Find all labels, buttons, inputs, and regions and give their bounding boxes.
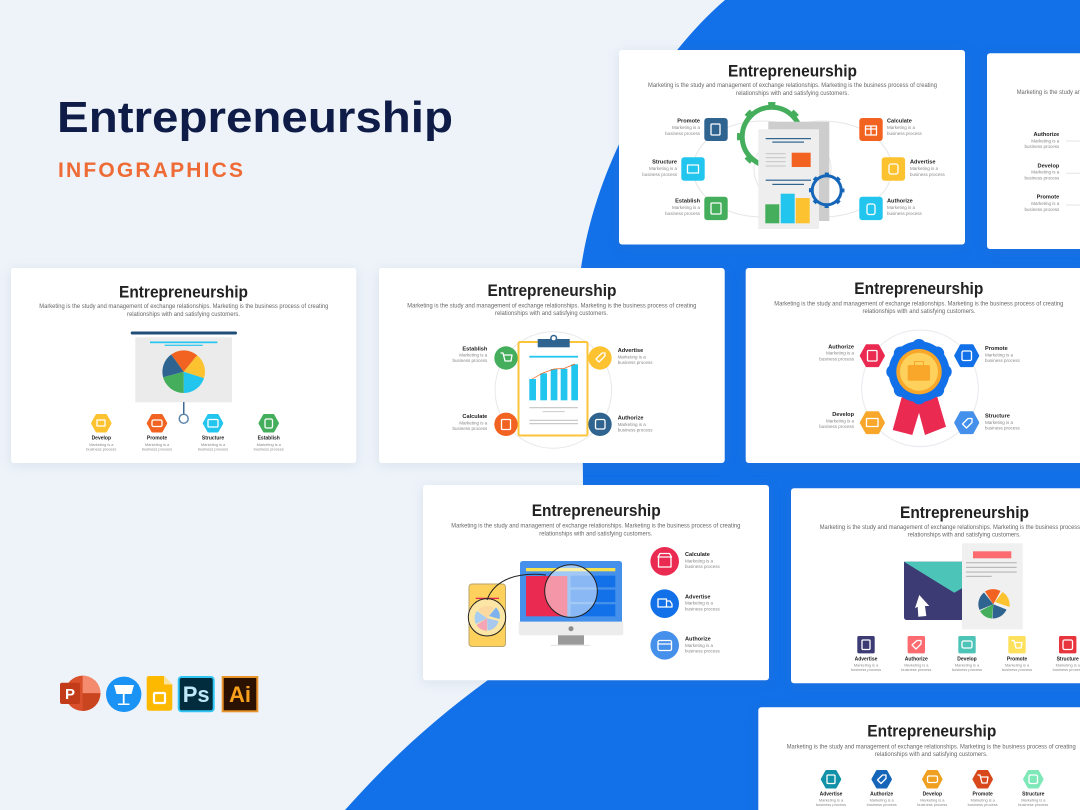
item: Authorize: Marketing is a	[618, 422, 646, 427]
item: Authorize: business process	[618, 427, 653, 432]
item: Authorize: Authorize	[905, 657, 928, 663]
item: Establish: Marketing is a	[459, 352, 488, 358]
item: Structure	[642, 157, 705, 181]
item: Advertise: Advertise	[685, 594, 710, 600]
panel: partial slide top right	[987, 53, 1080, 249]
item: Promote: Marketing is a	[145, 442, 170, 447]
item: Structure	[1018, 771, 1048, 807]
award badge	[886, 339, 952, 435]
item: Develop: Marketing is a	[826, 418, 854, 423]
pie chart	[978, 589, 1010, 619]
item: Calculate: Calculate	[887, 119, 912, 125]
item: Authorize: business process	[901, 667, 931, 672]
item: Promote: Marketing is a	[985, 352, 1014, 357]
item: Calculate	[859, 118, 923, 141]
heading: Entrepreneurship	[488, 282, 616, 300]
item: Structure: business process	[198, 447, 228, 452]
item: Advertise: Marketing is a	[819, 797, 844, 802]
item: Structure: Marketing is a	[201, 442, 226, 447]
item: Calculate: Calculate	[685, 552, 710, 558]
description: relationships with and satisfying customers.	[127, 312, 240, 318]
description: Marketing is the study and management of exchange relationships. Marketing is the business process of creating	[451, 524, 740, 530]
item: Promote: business process	[968, 802, 998, 807]
item: Advertise: business process	[910, 172, 946, 177]
item: Promote: Promote	[985, 346, 1008, 352]
item: Develop: Marketing is a	[89, 442, 114, 447]
panel: slide with monitor and phone	[423, 485, 769, 680]
report page	[962, 543, 1023, 629]
item: Authorize: Marketing is a	[826, 351, 854, 356]
magnifying lens	[487, 565, 597, 617]
item: Authorize: Authorize	[685, 636, 711, 642]
item: Promote: business process	[985, 358, 1021, 363]
item: Authorize: Authorize	[870, 791, 893, 797]
description: relationships with and satisfying customers.	[539, 532, 653, 538]
icon: PowerPoint	[60, 676, 100, 711]
heading: Entrepreneurship	[867, 723, 996, 741]
item: Promote: Promote	[1007, 657, 1027, 663]
item: Promote: Promote	[677, 119, 700, 125]
description	[774, 301, 1063, 315]
item: Establish: Marketing is a	[257, 442, 282, 447]
item: Authorize: business process	[685, 649, 721, 654]
item: Develop: business process	[86, 447, 116, 452]
item: Structure: Marketing is a	[1056, 662, 1080, 668]
item: Authorize: business process	[887, 211, 923, 216]
item: Authorize: Marketing is a	[1031, 138, 1060, 143]
pie chart	[162, 350, 205, 393]
heading: Entrepreneurship	[728, 62, 857, 80]
item: Promote: Promote	[147, 436, 167, 442]
item: Authorize	[650, 631, 721, 660]
description: relationships with and satisfying customers.	[736, 91, 849, 97]
description: relationships with and satisfying customers.	[862, 309, 976, 315]
item: Calculate	[453, 413, 518, 436]
item: Develop: business process	[819, 424, 855, 429]
item: Advertise	[851, 636, 881, 672]
item: Develop	[86, 415, 116, 452]
item: Calculate: business process	[685, 564, 721, 569]
item: Calculate: Marketing is a	[685, 558, 714, 564]
item: Develop: Develop	[923, 791, 942, 797]
icon: Illustrator: Ai	[229, 682, 251, 707]
description: Marketing is the study and management of exchange relationships. Marketing is the business process of creating	[407, 303, 696, 309]
item: Develop: Develop	[957, 657, 977, 663]
item: Authorize: business process	[1025, 144, 1060, 149]
item: Advertise: Advertise	[820, 791, 843, 797]
panel: slide with envelope and report	[791, 488, 1080, 683]
icon: Photoshop: Ps	[183, 682, 210, 707]
item: Establish: business process	[453, 358, 488, 363]
item: Structure: Structure	[985, 413, 1010, 419]
item: Develop	[952, 636, 982, 672]
item: Establish: business process	[254, 447, 284, 452]
item: Develop: Develop	[832, 412, 855, 418]
heading: Entrepreneurship	[854, 280, 983, 298]
item: Promote: business process	[1002, 667, 1032, 672]
description	[648, 83, 937, 97]
item: Develop	[819, 412, 884, 433]
icon: Google Slides	[147, 676, 172, 711]
panel: slide with document and gears	[619, 50, 965, 244]
item: Promote: business process	[142, 447, 172, 452]
item: Develop: business process	[1025, 175, 1060, 180]
item: Structure: Structure	[1057, 657, 1079, 663]
description: Marketing is the study and management of exchange relationships. Marketing is the business process of creating	[787, 744, 1076, 750]
desktop monitor	[519, 561, 623, 646]
blue background shape	[345, 0, 1080, 810]
item: Establish: Marketing is a	[672, 205, 700, 210]
item: Advertise: Marketing is a	[854, 662, 879, 668]
item: Authorize	[859, 197, 923, 220]
item: Calculate: Marketing is a	[459, 420, 488, 426]
panel: slide with clipboard chart	[379, 268, 725, 463]
item: Authorize: business process	[819, 356, 855, 361]
item: Establish: Establish	[462, 346, 488, 352]
item: Develop: Develop	[92, 436, 111, 442]
item: Advertise: Advertise	[910, 160, 936, 166]
item: Authorize: Marketing is a	[685, 643, 714, 648]
item: Advertise	[816, 771, 846, 807]
item: Promote: business process	[1025, 207, 1060, 212]
item: Develop: Develop	[1038, 163, 1060, 169]
item: Advertise	[882, 157, 946, 181]
item: Establish	[453, 346, 518, 370]
item: Advertise: business process	[851, 667, 881, 672]
heading: Entrepreneurship	[119, 283, 248, 301]
item: Authorize	[867, 771, 897, 807]
item: Structure: Marketing is a	[985, 420, 1014, 425]
item: Advertise	[650, 589, 721, 618]
item: Advertise: Marketing is a	[910, 166, 939, 171]
item: Structure	[1053, 636, 1080, 672]
item: Authorize	[819, 344, 884, 366]
item: Develop: Marketing is a	[1031, 170, 1060, 175]
icon: Photoshop	[179, 677, 214, 711]
description	[39, 304, 328, 318]
item: Promote: Marketing is a	[1031, 201, 1060, 206]
item: Structure: Structure	[652, 160, 677, 166]
item: Advertise: business process	[618, 360, 653, 365]
item: Authorize: business process	[867, 802, 897, 807]
item: Promote	[955, 346, 1021, 366]
item: Establish	[254, 415, 284, 452]
panel: bottom slide with hexagons	[758, 707, 1080, 810]
item: Develop: business process	[952, 667, 982, 672]
item: Calculate	[650, 547, 721, 576]
description: Marketing is the study and management of exchange relationships. Marketing is the business process of creating	[648, 83, 937, 89]
item: Structure	[955, 412, 1021, 433]
item: Authorize: Authorize	[618, 415, 643, 421]
item: Develop	[917, 771, 947, 807]
item: Calculate: Calculate	[462, 414, 487, 420]
heading: Entrepreneurship	[532, 502, 661, 520]
item: Advertise	[588, 346, 653, 370]
item: Calculate: business process	[453, 426, 488, 431]
description: Marketing is the study and management of exchange relationships. Marketing is the business process of creating	[39, 304, 328, 310]
icon: Illustrator	[223, 677, 257, 711]
item: Develop	[1025, 163, 1060, 180]
item: Advertise: business process	[816, 802, 846, 807]
item: Structure: business process	[1018, 802, 1048, 807]
item: Establish: Establish	[258, 436, 280, 442]
item: Promote: Marketing is a	[672, 125, 700, 130]
item: Authorize: Marketing is a	[870, 797, 895, 802]
panel: slide with presentation board	[11, 268, 356, 463]
item: Authorize: Authorize	[828, 344, 854, 350]
description	[451, 524, 740, 538]
item: Authorize: Authorize	[1034, 132, 1059, 138]
item: Promote	[665, 118, 728, 141]
description	[787, 744, 1076, 758]
item: Promote	[1002, 636, 1032, 672]
item: Promote: business process	[665, 131, 701, 136]
item: Develop: business process	[917, 802, 947, 807]
phone	[468, 584, 506, 646]
item: Calculate: business process	[887, 131, 923, 136]
item: Structure: Marketing is a	[649, 166, 677, 171]
item: Authorize: Marketing is a	[904, 662, 929, 668]
description: relationships with and satisfying customers.	[495, 311, 608, 317]
description: Marketing is the study and management of exchange relationships. Marketing is the business process of creating	[774, 301, 1063, 307]
item: Structure	[198, 415, 228, 452]
item: Structure: Structure	[1022, 791, 1045, 797]
software icons row	[60, 676, 257, 712]
clipboard with bar chart	[518, 336, 588, 436]
item: Advertise: Advertise	[855, 657, 878, 663]
description	[407, 303, 696, 317]
item: Structure: business process	[985, 426, 1021, 430]
item: Advertise: Marketing is a	[685, 601, 714, 606]
presentation board	[131, 332, 237, 423]
description: relationships with and satisfying customers.	[875, 752, 988, 758]
item: Advertise: Marketing is a	[618, 354, 646, 359]
item: Develop: Marketing is a	[955, 662, 980, 668]
item: Authorize	[901, 636, 931, 672]
item: Promote	[142, 415, 172, 452]
item: Promote: Promote	[1037, 195, 1059, 201]
item: Establish: Establish	[675, 199, 701, 205]
item: Advertise: business process	[685, 606, 721, 612]
item: Structure: Structure	[202, 436, 224, 442]
item: Authorize: Authorize	[887, 199, 913, 205]
envelope with cursor	[904, 562, 962, 620]
item: Establish: business process	[665, 211, 701, 216]
item: Authorize	[1025, 132, 1060, 149]
heading: Entrepreneurship	[900, 504, 1029, 522]
subtitle: INFOGRAPHICS	[58, 159, 243, 182]
item: Authorize: Marketing is a	[887, 205, 916, 210]
icon: green gear	[740, 105, 804, 169]
item: Develop: Marketing is a	[920, 797, 945, 802]
icon: PowerPoint: P	[65, 686, 75, 703]
item: Promote	[968, 771, 998, 807]
document illustration	[758, 122, 829, 229]
item: Structure: business process	[642, 172, 678, 177]
item: Structure: Marketing is a	[1021, 797, 1046, 802]
item: Establish	[665, 197, 728, 220]
item: Promote: Marketing is a	[971, 797, 996, 802]
item: Authorize	[588, 413, 653, 436]
item: Promote	[1025, 195, 1060, 212]
item: Promote: Promote	[973, 791, 993, 797]
description: relationships with and satisfying customers.	[908, 532, 1021, 538]
description	[820, 525, 1080, 538]
panel: slide with award badge	[746, 268, 1080, 463]
item: Promote: Marketing is a	[1005, 662, 1030, 668]
item: Calculate: Marketing is a	[887, 125, 916, 130]
item: Advertise: Advertise	[618, 348, 643, 354]
icon: Keynote	[106, 677, 141, 712]
icon: blue gear	[811, 174, 843, 206]
main title: Entrepreneurship	[57, 93, 453, 142]
